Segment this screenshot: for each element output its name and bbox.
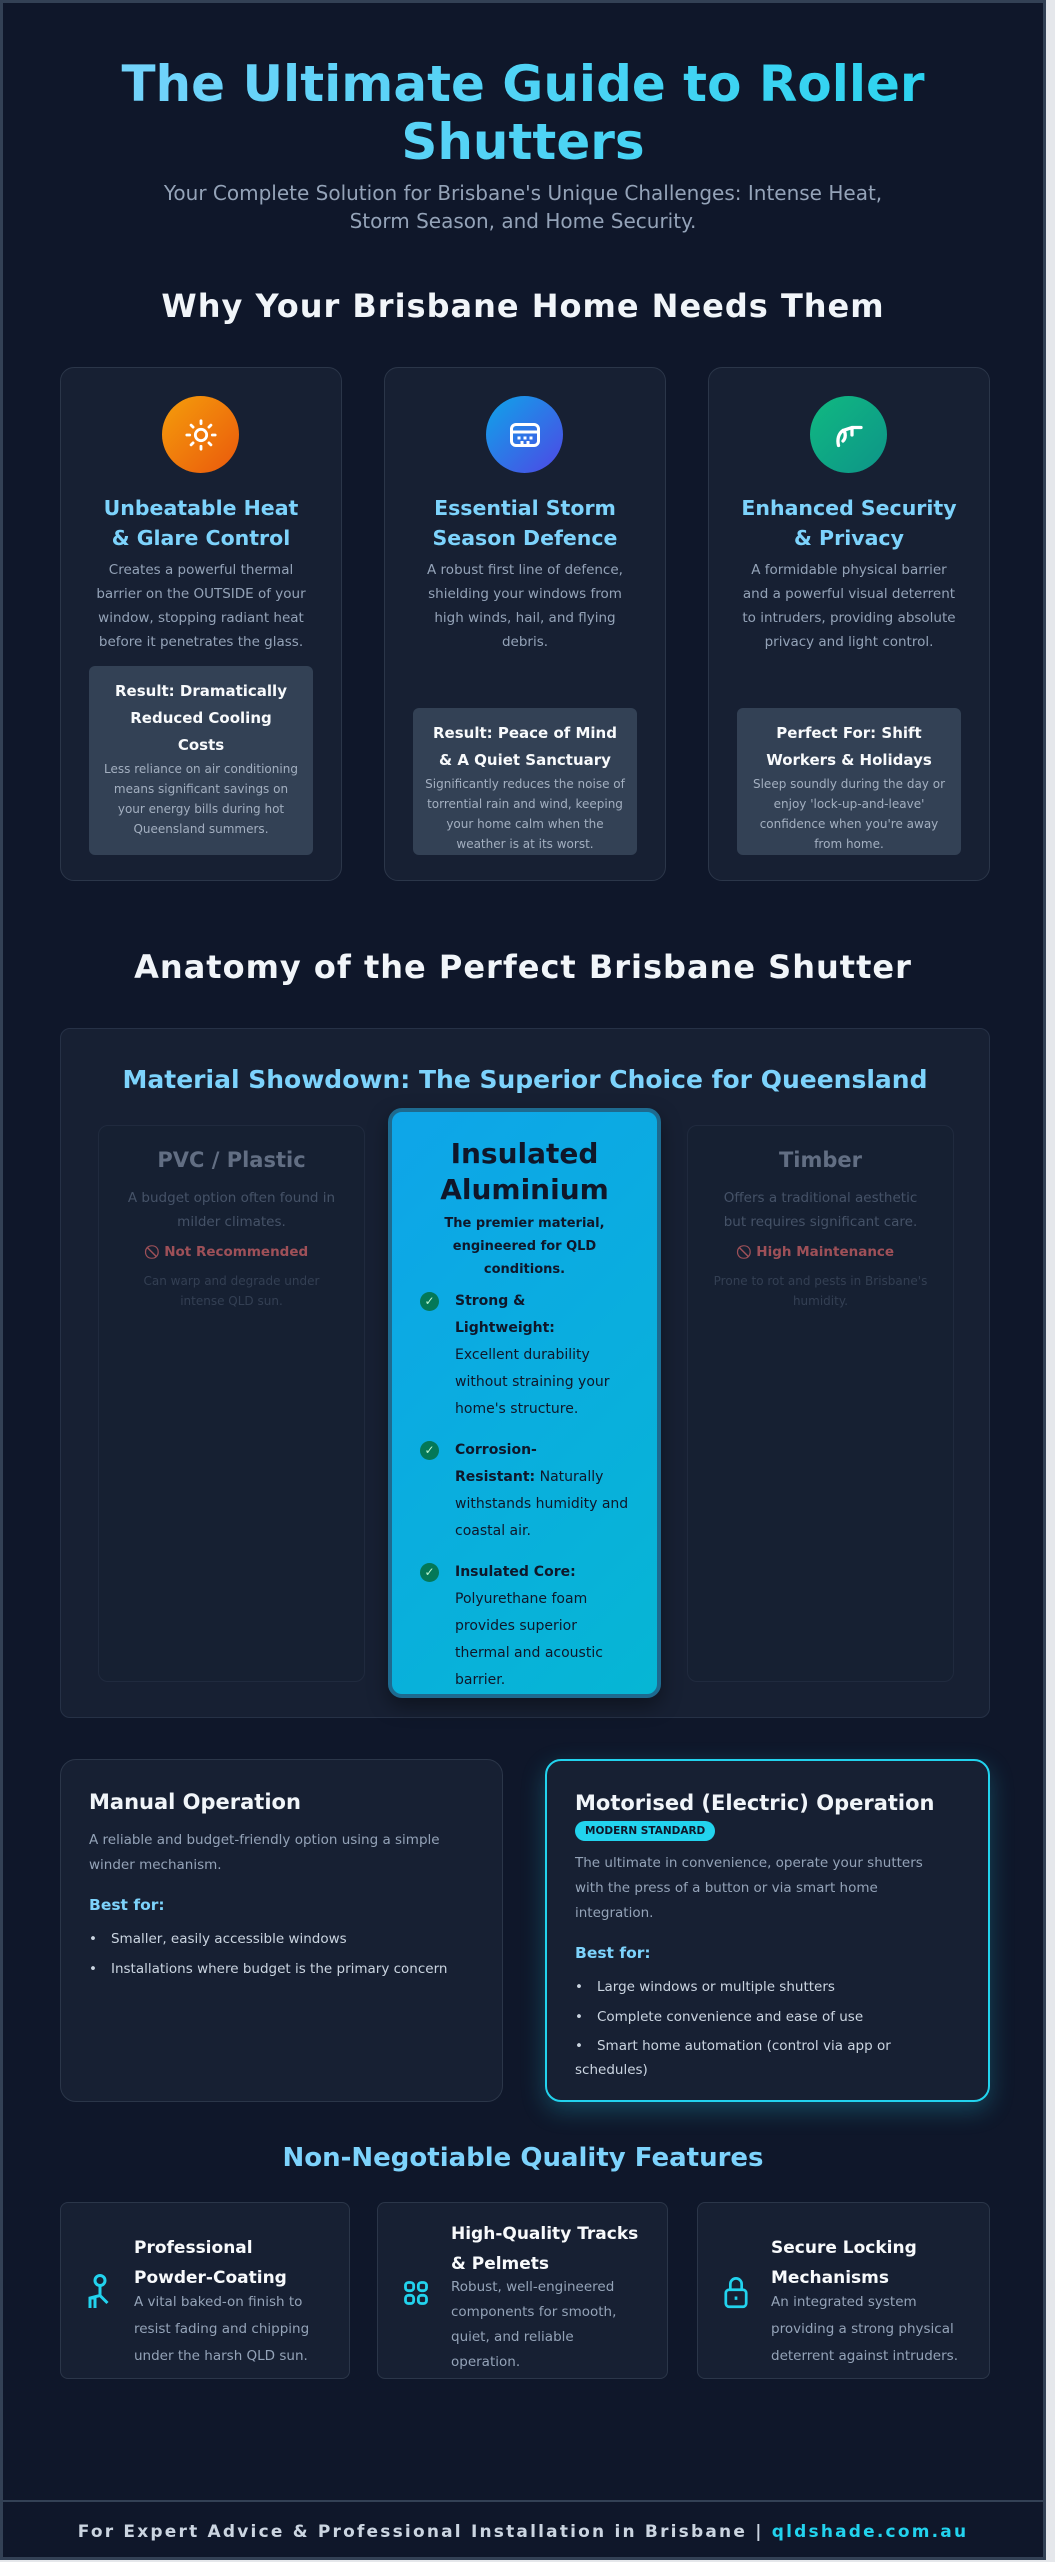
icon: [88, 2274, 108, 2308]
card: insulated aluminium: ✓: [424, 1443, 435, 1457]
result box: Result: Peace of Mind & A Quiet Sanctuary: [433, 724, 617, 769]
feature: powder coating: A vital baked-on finish to resist fading and chipping under the harsh QLD sun.: [134, 2294, 309, 2364]
panel: motorised operation: Complete convenience and ease of use: [597, 2009, 863, 2025]
card: timber: Timber: [779, 1148, 862, 1172]
heading: quality features: Non-Negotiable Quality Features: [282, 2143, 764, 2173]
result box: Reduced Cooling: [130, 709, 272, 727]
card: insulated aluminium: ✓: [424, 1565, 435, 1579]
panel: motorised operation: [545, 1759, 990, 2102]
heading: Material Showdown: The Superior Choice for Queensland: [123, 1065, 927, 1094]
feature: locking: An integrated system providing a strong physical deterrent against intruders.: [771, 2294, 958, 2364]
card: insulated aluminium: ✓: [424, 1294, 435, 1308]
card: timber: Offers a traditional aesthetic but requires significant care.: [724, 1190, 917, 1230]
result box: Significantly reduces the noise of torrential rain and wind, keeping your home calm when the weather is at its worst.: [425, 777, 625, 851]
heading: why: Why Your Brisbane Home Needs Them: [161, 287, 885, 325]
result box: Less reliance on air conditioning means significant savings on your energy bills during hot Queensland summers.: [104, 762, 298, 836]
feature: tracks: Robust, well-engineered components for smooth, quiet, and reliable operation.: [451, 2279, 616, 2370]
heading: Enhanced Security & Privacy: [741, 496, 957, 550]
feature: locking: Secure Locking Mechanisms: [771, 2238, 917, 2288]
result box: Costs: [178, 736, 224, 754]
panel: motorised operation: Motorised (Electric) Operation: [575, 1791, 934, 1815]
subtitle: Your Complete Solution for Brisbane's Unique Challenges: Intense Heat, Storm Season, and Home Security.: [164, 181, 882, 233]
feature: powder coating: [60, 2202, 350, 2379]
result box: Sleep soundly during the day or enjoy 'lock-up-and-leave' confidence when you're away from home.: [753, 777, 945, 851]
feature: tracks: High-Quality Tracks & Pelmets: [451, 2224, 638, 2274]
heading: anatomy: Anatomy of the Perfect Brisbane Shutter: [134, 948, 912, 986]
panel: motorised operation: Best for:: [575, 1944, 651, 1962]
card: insulated aluminium: Strong &: [455, 1293, 525, 1309]
heading: & Glare Control: [112, 526, 290, 550]
heading: Essential Storm Season Defence: [433, 496, 617, 550]
card: timber: Prone to rot and pests in Brisbane's humidity.: [714, 1274, 927, 1308]
badge: [575, 1821, 715, 1841]
card: pvc: A budget option often found in milder climates.: [128, 1190, 335, 1230]
title: The Ultimate Guide to Roller: [121, 55, 925, 113]
title: [3, 55, 1043, 171]
text: A robust first line of defence, shielding your windows from high winds, hail, and flying debris.: [427, 562, 623, 650]
card: insulated aluminium: [388, 1108, 661, 1698]
title: Shutters: [401, 113, 645, 171]
card: insulated aluminium: Lightweight:: [455, 1320, 555, 1336]
panel: manual operation: Manual Operation: [89, 1790, 301, 1814]
icon: [404, 2281, 428, 2305]
card: insulated aluminium: Insulated Core:: [455, 1564, 576, 1580]
panel: material showdown: [60, 1028, 990, 1718]
result box: [89, 666, 313, 855]
card: insulated aluminium: Polyurethane foam provides superior thermal and acoustic barrier.: [455, 1591, 603, 1688]
card: pvc: ⃠ Not Recommended: [155, 1244, 308, 1260]
card: timber: [687, 1125, 954, 1682]
panel: security: [708, 367, 990, 881]
feature: tracks: [377, 2202, 668, 2379]
card: timber: ⃠ High Maintenance: [747, 1244, 894, 1260]
panel: heat: [60, 367, 342, 881]
panel: manual operation: A reliable and budget-friendly option using a simple winder mechanism.: [89, 1832, 440, 1873]
panel: motorised operation: Large windows or multiple shutters: [597, 1979, 835, 1995]
card: pvc: [98, 1125, 365, 1682]
panel: storm: [384, 367, 666, 881]
panel: motorised operation: The ultimate in convenience, operate your shutters with the press of a button or via smart home integration.: [575, 1855, 923, 1921]
panel: manual operation: [60, 1759, 503, 2102]
card: insulated aluminium: Excellent durability without straining your home's structure.: [455, 1347, 610, 1417]
feature: locking: [697, 2202, 990, 2379]
text: Creates a powerful thermal barrier on the OUTSIDE of your window, stopping radiant heat before it penetrates the glass.: [96, 562, 306, 650]
card: pvc: Can warp and degrade under intense QLD sun.: [144, 1274, 319, 1308]
footer: For Expert Advice & Professional Installation in Brisbane | qldshade.com.au: [78, 2522, 968, 2542]
card: pvc: PVC / Plastic: [157, 1148, 306, 1172]
feature: powder coating: Professional Powder-Coating: [134, 2238, 287, 2288]
panel: manual operation: Smaller, easily accessible windows: [111, 1931, 347, 1947]
card: insulated aluminium: Resistant: Naturally withstands humidity and coastal air.: [455, 1469, 628, 1539]
heading: Unbeatable Heat: [104, 496, 298, 520]
panel: manual operation: Installations where budget is the primary concern: [111, 1961, 447, 1977]
panel: motorised operation: Smart home automation (control via app or schedules): [575, 2038, 891, 2078]
icon: storm: [486, 396, 563, 473]
result box: Result: Dramatically: [115, 682, 287, 700]
badge: MODERN STANDARD: [585, 1825, 705, 1837]
result box: [737, 708, 961, 855]
card: insulated aluminium: The premier material, engineered for QLD conditions.: [444, 1216, 605, 1277]
heading: [104, 496, 298, 550]
text: A formidable physical barrier and a powerful visual deterrent to intruders, providing absolute privacy and light control.: [742, 562, 956, 650]
panel: manual operation: Best for:: [89, 1896, 165, 1914]
icon: [724, 2277, 748, 2308]
result box: Perfect For: Shift Workers & Holidays: [766, 724, 932, 769]
result box: [413, 708, 637, 855]
icon: sun: [162, 396, 239, 473]
icon: security: [810, 396, 887, 473]
footer: [3, 2500, 1043, 2560]
card: insulated aluminium: Corrosion-: [455, 1442, 537, 1458]
card: insulated aluminium: Insulated Aluminium: [440, 1137, 609, 1206]
